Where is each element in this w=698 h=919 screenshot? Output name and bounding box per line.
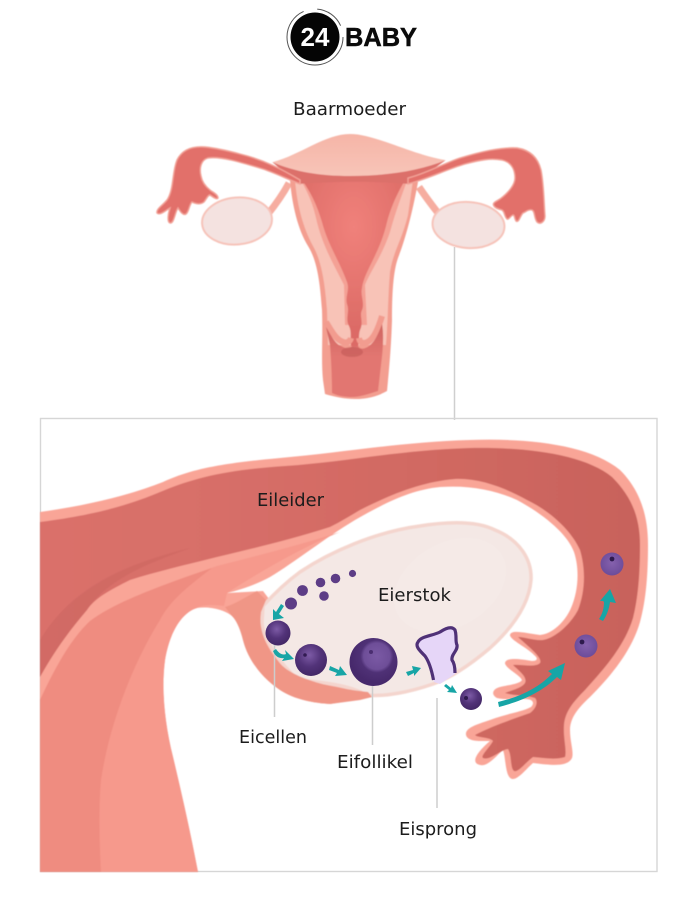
leader line: Eifollikel <box>372 686 374 745</box>
leader line: Eicellen <box>274 636 276 717</box>
logo: 24 Baby: 24 <box>301 22 330 52</box>
cervix lip lining <box>326 316 382 343</box>
ovary pedestal <box>225 591 372 704</box>
fundus dark band <box>272 160 446 184</box>
leader line: Eisprong <box>436 698 438 808</box>
egg cell <box>266 620 290 646</box>
fundus <box>273 134 445 180</box>
detail panel frame <box>40 418 657 872</box>
logo: 24 Baby: BABY <box>345 22 417 52</box>
left ovary <box>200 195 274 247</box>
label: Eisprong: Eisprong <box>399 819 477 840</box>
ovary <box>262 523 531 695</box>
released egg <box>460 688 482 710</box>
label: Eierstok: Eierstok <box>378 585 452 606</box>
cervix and vagina <box>326 324 383 397</box>
label: Eifollikel: Eifollikel <box>337 752 413 773</box>
right fallopian tube <box>408 148 545 223</box>
label: Eicellen: Eicellen <box>239 727 307 748</box>
detail panel: fallopian tube and ovary <box>40 440 648 872</box>
ruptured follicle <box>417 628 457 684</box>
teal arrows <box>273 589 616 707</box>
uterus diagram <box>157 134 545 399</box>
egg in tube, upper <box>600 552 624 576</box>
heading: Baarmoeder: Baarmoeder <box>293 99 407 120</box>
left ovarian ligament <box>268 183 289 214</box>
ovary soft highlight <box>377 519 523 651</box>
logo: 24 Baby <box>287 9 417 65</box>
right ovary <box>431 200 506 250</box>
small eggs <box>285 570 356 610</box>
large follicle <box>350 638 398 686</box>
label: Eileider: Eileider <box>257 490 325 511</box>
uterine cavity <box>299 175 408 346</box>
uterine wall darker band <box>40 568 212 872</box>
right ovarian ligament <box>419 187 438 213</box>
egg in tube, lower <box>574 634 598 658</box>
tube and uterine wall outer shape <box>40 440 648 872</box>
vaginal vault shading <box>341 347 363 357</box>
uterus outer wall <box>290 180 418 399</box>
uterus muscle layer <box>295 180 413 345</box>
ruptured follicle outline <box>417 628 457 680</box>
left fallopian tube <box>157 147 300 223</box>
tube lumen <box>40 448 640 771</box>
uterine lining edge <box>300 178 408 325</box>
tube lumen shadow <box>40 548 190 677</box>
uterine wall lighter band <box>40 532 340 872</box>
leader line from ovary to detail panel <box>454 247 456 420</box>
growing follicle <box>295 644 327 676</box>
